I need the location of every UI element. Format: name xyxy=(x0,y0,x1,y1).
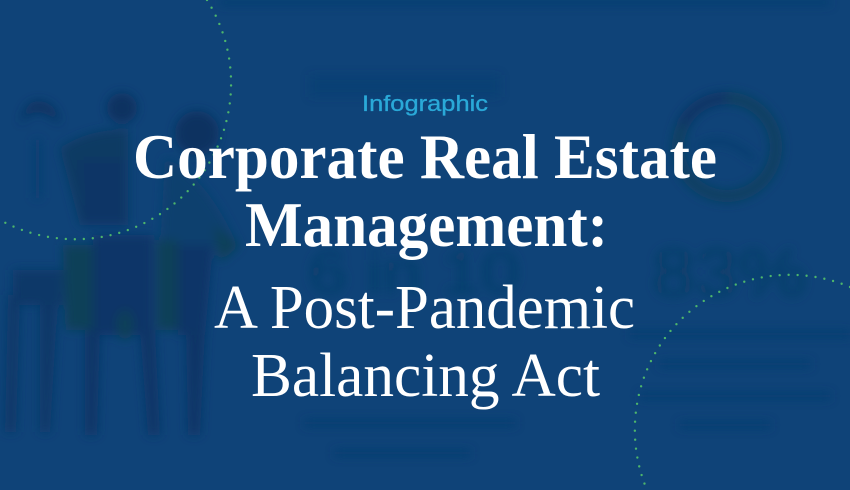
eyebrow label: Infographic xyxy=(362,91,488,116)
blurred statistic: 83%: 83% xyxy=(652,235,807,311)
blurred illustration: group of people xyxy=(5,93,240,435)
dotted circle: top left xyxy=(0,0,231,239)
blurred donut chart xyxy=(678,98,776,196)
title line 1: Corporate Real Estate xyxy=(133,121,717,192)
person 3 xyxy=(157,111,240,435)
subtitle line 2: Balancing Act xyxy=(251,342,600,410)
title line 2: Management: xyxy=(245,189,608,260)
person 2 xyxy=(60,93,160,435)
title xyxy=(133,121,717,410)
blurred statistic: 6 in 10: 6 in 10 xyxy=(308,239,520,306)
person 1 xyxy=(5,101,63,432)
blurred header strip and copy lines xyxy=(220,0,850,456)
subtitle line 1: A Post-Pandemic xyxy=(214,274,635,342)
dotted circle: bottom right xyxy=(635,275,850,490)
